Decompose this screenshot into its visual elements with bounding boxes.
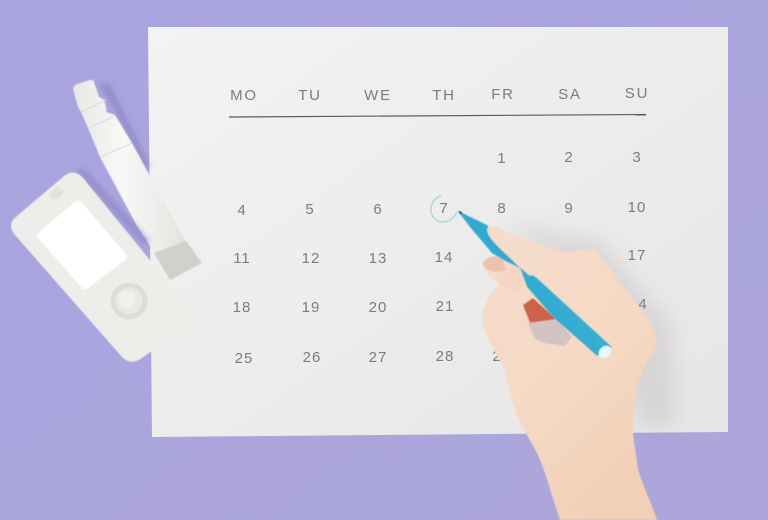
- calendar dates: 25: [235, 350, 253, 367]
- calendar dates: 17: [628, 247, 646, 264]
- calendar dates: 13: [369, 250, 387, 267]
- calendar dates: 28: [436, 348, 454, 365]
- calendar weekday header: SU: [625, 85, 649, 102]
- calendar dates: 3: [632, 149, 642, 166]
- calendar weekday header: [230, 85, 649, 104]
- icon: blue circle around 7: [431, 196, 457, 222]
- calendar dates: [233, 149, 648, 367]
- gap between fingers: [523, 298, 557, 323]
- calendar dates: 27: [369, 349, 387, 366]
- hand holding pen: [458, 211, 657, 520]
- calendar dates: 1: [497, 150, 507, 167]
- calendar dates: 26: [303, 349, 321, 366]
- calendar dates: 21: [436, 298, 454, 315]
- calendar dates: 19: [302, 299, 320, 316]
- calendar dates: 2: [564, 149, 574, 166]
- calendar weekday header: TU: [298, 87, 322, 104]
- calendar dates: 5: [305, 201, 315, 218]
- calendar dates: 9: [564, 200, 574, 217]
- calendar dates: 12: [302, 250, 320, 267]
- calendar weekday header: FR: [491, 86, 515, 103]
- hand base: [482, 226, 657, 520]
- lancing device: [73, 80, 202, 280]
- thumb: [499, 267, 523, 292]
- index finger over pen: [487, 226, 560, 276]
- hand shadow: [505, 225, 676, 428]
- calendar dates: 14: [435, 249, 453, 266]
- calendar dates: 2: [492, 348, 502, 365]
- calendar dates: 10: [628, 199, 646, 216]
- calendar weekday header: MO: [230, 87, 258, 104]
- calendar dates: 11: [233, 250, 251, 267]
- fingernail: [483, 256, 506, 272]
- calendar dates: 20: [369, 299, 387, 316]
- calendar dates: 4: [237, 202, 247, 219]
- calendar weekday header: TH: [432, 87, 456, 104]
- panel: paper calendar sheet: [148, 27, 728, 437]
- glucose meter: [11, 168, 193, 362]
- calendar dates: 8: [497, 200, 507, 217]
- pen: [458, 211, 614, 361]
- calendar weekday header: WE: [364, 87, 392, 104]
- calendar dates: 4: [638, 296, 648, 313]
- calendar dates: 6: [373, 201, 383, 218]
- calendar dates: 18: [233, 299, 251, 316]
- calendar weekday header: SA: [558, 86, 582, 103]
- calendar dates: 7: [439, 200, 449, 217]
